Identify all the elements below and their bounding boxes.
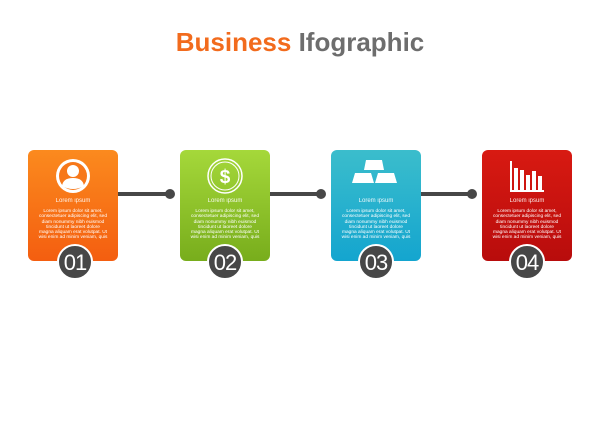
body text: tincidunt ut laoreet dolore: [500, 225, 554, 230]
number 01: 01: [64, 250, 86, 275]
number 03: 03: [365, 250, 387, 275]
panel: step 1: [28, 150, 118, 261]
body text: diam nonummy nibh euismod: [42, 220, 104, 225]
body text: [342, 208, 410, 240]
body text: diam nonummy nibh euismod: [496, 220, 558, 225]
body text: consectetuer adipiscing elit, sed: [39, 214, 107, 219]
body text: magna aliquam erat volutpat. Ut: [493, 230, 561, 235]
panel: step 3: [331, 150, 421, 261]
body text: consectetuer adipiscing elit, sed: [191, 214, 259, 219]
panel: step 4: [482, 150, 572, 261]
number 02: [207, 244, 243, 280]
icon: bar chart: [510, 161, 544, 192]
body text: [190, 208, 260, 240]
body text: magna aliquam erat volutpat. Ut: [191, 230, 259, 235]
body text: consectetuer adipiscing elit, sed: [342, 214, 410, 219]
body text: Lorem ipsum dolor sit amet,: [43, 209, 103, 214]
dot 2: [316, 189, 326, 199]
panel: step 2: [180, 150, 270, 261]
body text: diam nonummy nibh euismod: [345, 220, 407, 225]
body text: wisi enim ad minim veniam, quis: [493, 235, 561, 240]
icon: dollar: [207, 158, 243, 194]
body text: tincidunt ut laoreet dolore: [46, 225, 100, 230]
body text: Lorem ipsum dolor sit amet,: [497, 209, 557, 214]
body text: consectetuer adipiscing elit, sed: [493, 214, 561, 219]
body text: magna aliquam erat volutpat. Ut: [342, 230, 410, 235]
heading: Lorem ipsum: [510, 198, 544, 204]
icon: gold bars: [352, 160, 397, 183]
body text: wisi enim ad minim veniam, quis: [342, 235, 410, 240]
body text: tincidunt ut laoreet dolore: [198, 225, 252, 230]
heading: Lorem ipsum: [359, 198, 393, 204]
heading: Lorem ipsum: [56, 198, 90, 204]
title: Business Ifographic: [176, 27, 424, 57]
body text: wisi enim ad minim veniam, quis: [39, 235, 107, 240]
dot 1: [165, 189, 175, 199]
number 01: [57, 244, 93, 280]
connector 2: [269, 192, 319, 196]
icon: dollar: $: [220, 167, 231, 188]
body text: diam nonummy nibh euismod: [194, 220, 256, 225]
icon: person: [56, 159, 90, 193]
connector 1: [118, 192, 168, 196]
body text: tincidunt ut laoreet dolore: [349, 225, 403, 230]
number 03: [358, 244, 394, 280]
body text: Lorem ipsum dolor sit amet,: [195, 209, 255, 214]
body text: wisi enim ad minim veniam, quis: [191, 235, 259, 240]
number 04: 04: [516, 250, 538, 275]
body text: [492, 208, 562, 240]
dot 3: [467, 189, 477, 199]
number 02: 02: [214, 250, 236, 275]
body text: [38, 208, 108, 240]
body text: magna aliquam erat volutpat. Ut: [39, 230, 107, 235]
heading: Lorem ipsum: [208, 198, 242, 204]
connector 3: [420, 192, 470, 196]
number 04: [509, 244, 545, 280]
body text: Lorem ipsum dolor sit amet,: [346, 209, 406, 214]
